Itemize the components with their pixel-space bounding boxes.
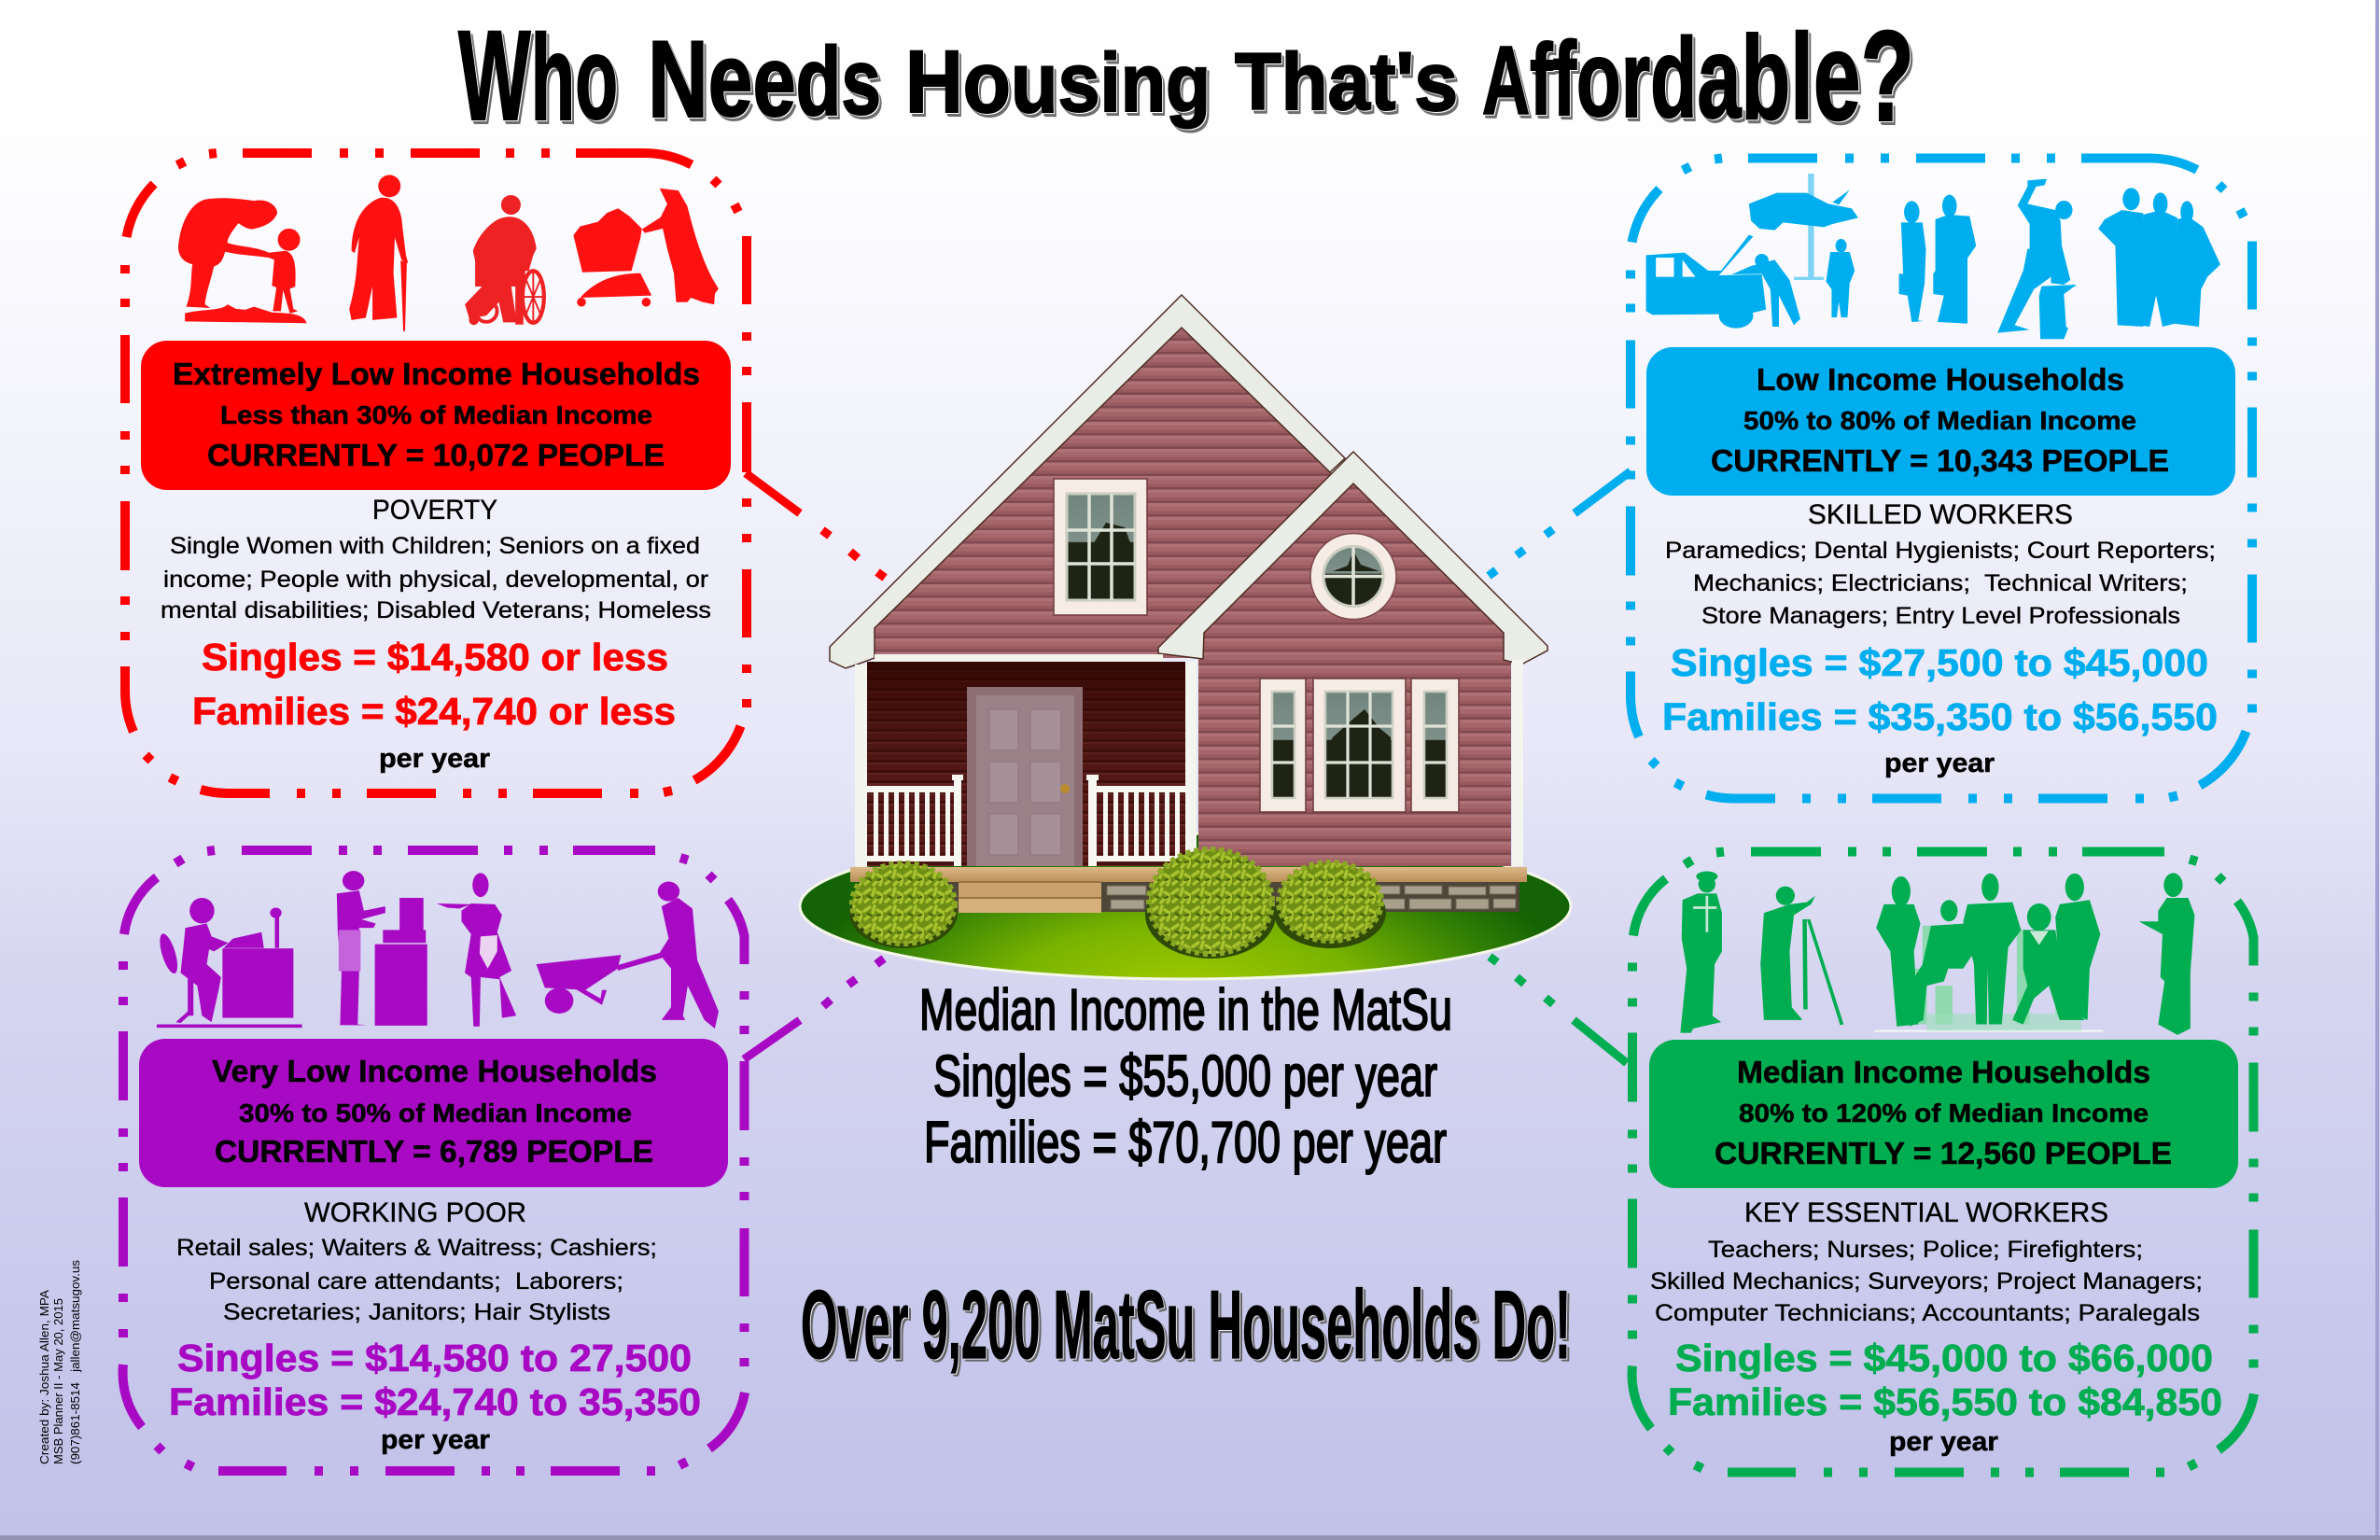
icon: elderly man with cane — [349, 175, 408, 331]
right wall — [1198, 483, 1511, 866]
title: d — [796, 27, 841, 135]
income limits: blue — [1662, 641, 2218, 738]
text: who is included: income; People with physical, developmental, or — [163, 567, 708, 593]
title: H — [905, 33, 963, 132]
title — [458, 4, 1914, 148]
bush middle — [1145, 849, 1276, 959]
title: e — [753, 25, 796, 138]
title: h — [531, 9, 575, 146]
title: e — [1813, 7, 1861, 147]
text: skilled jobs — [1665, 538, 2216, 629]
panel: extremely low income — [125, 153, 747, 793]
title: ' — [1395, 35, 1414, 128]
text: skilled jobs: Mechanics; Electricians; Technical Writers; — [1693, 570, 2188, 596]
title: N — [648, 20, 708, 141]
house illustration — [800, 295, 1571, 979]
upper window — [1054, 479, 1147, 615]
lower windows — [1260, 679, 1459, 812]
icon: mother and child — [178, 198, 307, 323]
main wall — [875, 328, 1353, 658]
icon: man with wheelbarrow — [537, 882, 719, 1029]
income limits: red — [192, 636, 676, 733]
banner: green: Median Income Households — [1737, 1055, 2150, 1089]
banner: blue — [1646, 347, 2235, 496]
icon: surveyor — [1760, 887, 1843, 1025]
text: who is included — [161, 533, 711, 623]
icon: three uniformed workers — [2098, 188, 2220, 327]
income limits: green — [1668, 1337, 2222, 1423]
dashed border: green — [1632, 851, 2254, 1473]
banner: red: CURRENTLY = 10,072 PEOPLE — [207, 438, 665, 472]
title: a — [1697, 14, 1742, 143]
panel: median income — [1632, 851, 2254, 1473]
per year: purple: per year — [381, 1425, 490, 1455]
title: f — [1530, 22, 1553, 135]
main roof trim — [830, 295, 1345, 668]
round window — [1310, 534, 1396, 620]
title: i — [1100, 35, 1121, 129]
title: u — [1011, 35, 1057, 131]
icon: police officer — [1680, 872, 1722, 1033]
lawn — [800, 833, 1571, 979]
text: skilled jobs: Store Managers; Entry Level Professionals — [1701, 603, 2180, 629]
median income summary — [919, 978, 1452, 1175]
text: essential jobs: Skilled Mechanics; Surveyors; Project Managers; — [1650, 1268, 2203, 1295]
income limits: purple — [169, 1337, 701, 1423]
text: Over 9,200 MatSu Households Do! — [801, 1271, 1571, 1379]
banner: purple: CURRENTLY = 6,789 PEOPLE — [215, 1134, 653, 1169]
credits — [37, 1259, 82, 1464]
text: working poor jobs: Retail sales; Waiters & Waitress; Cashiers; — [176, 1235, 657, 1261]
text: working poor jobs: Personal care attendants; Laborers; — [209, 1268, 623, 1295]
income limits: red: Singles = $14,580 or less — [202, 636, 668, 679]
credits: (907)861-8514 jallen@matsugov.us — [68, 1259, 82, 1464]
banner: blue: Low Income Households — [1757, 362, 2124, 397]
icon: waitress — [437, 873, 516, 1027]
bush right — [1274, 862, 1386, 948]
icon: car on lift — [1749, 174, 1858, 317]
panel: very low income — [123, 850, 745, 1471]
title: l — [1790, 8, 1813, 145]
title: d — [1650, 14, 1697, 141]
text: who is included: Single Women with Children; Seniors on a fixed — [170, 533, 700, 559]
dashed border: red — [125, 153, 747, 793]
banner: purple: Very Low Income Households — [212, 1054, 657, 1088]
title: n — [1121, 36, 1166, 129]
text: who is included: mental disabilities; Disabled Veterans; Homeless — [161, 597, 711, 623]
title: b — [1741, 13, 1790, 145]
heading: skilled workers: SKILLED WORKERS — [1808, 499, 2073, 530]
deck and steps — [850, 867, 1527, 913]
text: working poor jobs: Secretaries; Janitors; Hair Stylists — [223, 1299, 610, 1325]
icon: blacksmith — [1997, 179, 2077, 339]
banner: green: CURRENTLY = 12,560 PEOPLE — [1715, 1136, 2172, 1170]
columns — [855, 660, 1523, 866]
income limits: blue: Families = $35,350 to $56,550 — [1662, 695, 2218, 738]
banner: blue: CURRENTLY = 10,343 PEOPLE — [1711, 443, 2169, 478]
door — [967, 687, 1083, 866]
dashed border: blue — [1631, 158, 2252, 798]
median income summary: Singles = $55,000 per year — [933, 1044, 1437, 1109]
banner: red: Extremely Low Income Households — [173, 357, 700, 391]
icons: mechanics, professionals, blacksmith, uniformed workers — [1646, 174, 2220, 339]
porch railings — [867, 775, 1185, 866]
icons: mother and child, elderly man, wheelchair, shopping cart — [178, 175, 719, 331]
title: s — [1057, 35, 1100, 130]
gable trim — [1158, 452, 1547, 665]
title: e — [708, 22, 753, 139]
text: essential jobs: Computer Technicians; Accountants; Paralegals — [1655, 1300, 2200, 1326]
heading: poverty: POVERTY — [372, 495, 497, 525]
per year: red: per year — [379, 744, 490, 774]
title: o — [963, 34, 1011, 131]
icons: police, surveyor, office team, doctor — [1680, 872, 2194, 1035]
icon: typist at desk — [156, 898, 302, 1028]
title: A — [1482, 25, 1530, 134]
icon: two professionals — [1899, 195, 1976, 324]
banner: red: Less than 30% of Median Income — [220, 400, 652, 429]
per year: blue: per year — [1884, 749, 1995, 778]
income limits: green: Families = $56,550 to $84,850 — [1668, 1380, 2222, 1423]
banner: purple: 30% to 50% of Median Income — [239, 1099, 632, 1127]
title: W — [458, 4, 531, 147]
title: r — [1621, 19, 1650, 141]
text: skilled jobs: Paramedics; Dental Hygienists; Court Reporters; — [1665, 538, 2216, 564]
porch interior — [867, 662, 1185, 866]
title: o — [1576, 19, 1621, 139]
bush left — [849, 863, 958, 948]
connector: purple — [744, 959, 884, 1059]
title: s — [1414, 36, 1458, 129]
banner: red — [141, 341, 731, 490]
income limits: purple: Singles = $14,580 to 27,500 — [177, 1337, 692, 1379]
connector: blue — [1489, 471, 1631, 576]
title: s — [841, 29, 881, 133]
title: h — [1281, 36, 1328, 126]
text: working poor jobs — [176, 1235, 657, 1325]
icon: shopping cart woman — [573, 189, 719, 307]
income limits: red: Families = $24,740 or less — [192, 690, 676, 733]
title: o — [575, 13, 618, 144]
banner: green — [1649, 1040, 2238, 1188]
heading: working poor: WORKING POOR — [304, 1197, 526, 1228]
median income summary: Median Income in the MatSu — [919, 978, 1452, 1043]
text: essential jobs: Teachers; Nurses; Police; Firefighters; — [1708, 1237, 2143, 1263]
icon: office team — [1874, 874, 2104, 1032]
income limits: green: Singles = $45,000 to $66,000 — [1675, 1337, 2213, 1379]
title: t — [1370, 35, 1395, 126]
connector: green — [1490, 957, 1627, 1063]
banner: blue: 50% to 80% of Median Income — [1743, 406, 2136, 435]
stone foundation — [859, 882, 1519, 912]
dashed border: purple — [123, 850, 745, 1471]
title: a — [1328, 36, 1371, 126]
title: f — [1553, 21, 1577, 138]
title: g — [1166, 37, 1211, 129]
median income summary: Families = $70,700 per year — [924, 1111, 1447, 1175]
title: T — [1235, 36, 1281, 126]
beam — [875, 654, 1163, 662]
icon: barista — [337, 871, 427, 1026]
banner: purple — [139, 1039, 728, 1187]
banner: green: 80% to 120% of Median Income — [1739, 1099, 2149, 1127]
icon: doctor — [2139, 873, 2194, 1035]
per year: green: per year — [1889, 1427, 1998, 1457]
title: ? — [1861, 5, 1914, 148]
income limits: blue: Singles = $27,500 to $45,000 — [1671, 641, 2208, 684]
icon: truck and mechanic — [1646, 235, 1800, 329]
text: essential jobs — [1650, 1237, 2203, 1326]
icon: wheelchair user — [465, 195, 544, 325]
connector: red — [746, 473, 885, 578]
icons: typist, barista, waitress, laborer — [156, 871, 719, 1029]
panel: low income — [1631, 158, 2252, 798]
heading: key essential workers: KEY ESSENTIAL WORKERS — [1744, 1197, 2108, 1228]
credits: Created by: Joshua Allen, MPA — [37, 1290, 51, 1464]
credits: MSB Planner II - May 20, 2015 — [51, 1298, 65, 1464]
income limits: purple: Families = $24,740 to 35,350 — [169, 1380, 701, 1423]
